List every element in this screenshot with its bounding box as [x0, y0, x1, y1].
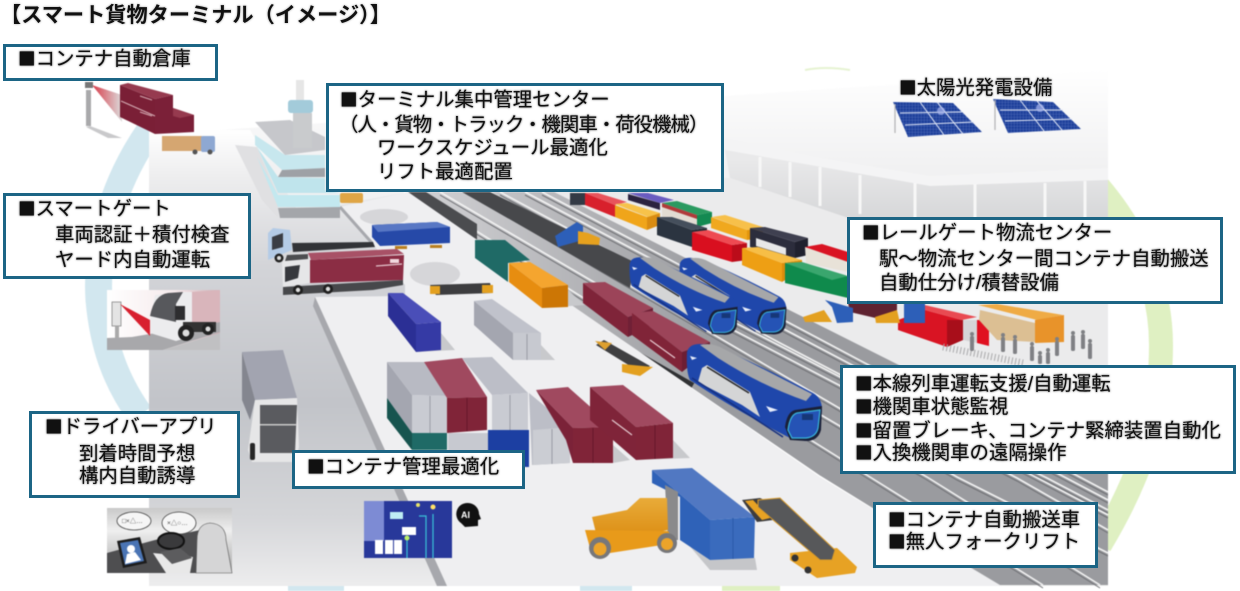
label: terminal central control center: ■ターミナル集中管理センター: [340, 87, 610, 112]
label: container management optimization: ■コンテナ管理最適化: [307, 454, 499, 479]
AGV carts: [430, 283, 653, 376]
label: train operation functions: ■入換機関車の遠隔操作: [855, 440, 1067, 465]
rail gate logistics center: [803, 300, 1064, 363]
label: automated vehicles: [873, 502, 1098, 568]
label: smart gate: 車両認証＋積付検査: [55, 224, 230, 246]
green ring arc: [722, 68, 1161, 591]
label: container automated warehouse: ■コンテナ自動倉庫: [18, 46, 191, 71]
label: terminal central control center: リフト最適配置: [377, 161, 513, 183]
rail yard: [404, 192, 1108, 588]
driver app image: [107, 508, 232, 573]
lift with blue container on track: [555, 222, 600, 247]
label: solar power equipment: ■太陽光発電設備: [899, 75, 1052, 100]
label: terminal central control center: （人・貨物・トラック・機関車・荷役機械）: [339, 114, 707, 136]
label: train operation functions: ■留置ブレーキ、コンテナ緊締装置自動化: [855, 418, 1221, 443]
approaching truck: [242, 350, 299, 462]
label: train operation functions: ■本線列車運転支援/自動運転: [855, 371, 1111, 396]
ground and road: [149, 70, 1108, 586]
conveyor AGV: [742, 498, 857, 578]
solar panels: [893, 99, 1081, 137]
label: driver app: 構内自動誘導: [79, 465, 195, 487]
label: container automated warehouse: [3, 44, 218, 81]
warehouse truck: [162, 136, 215, 154]
blue ring arc: [99, 130, 632, 591]
logistics building wall: [540, 138, 1108, 470]
title: 【スマート貨物ターミナル（イメージ）】: [0, 4, 391, 27]
AI optimization screen: [364, 501, 452, 558]
AI head icon: AI: [461, 510, 470, 520]
label: train operation functions: ■機関車状態監視: [855, 394, 1008, 419]
label: driver app: [29, 411, 240, 498]
container warehouse sensor and containers: [85, 82, 194, 138]
label: smart gate: ■スマートゲート: [18, 196, 171, 221]
label: automated vehicles: ■無人フォークリフト: [888, 529, 1080, 554]
label: driver app: ■ドライバーアプリ: [45, 414, 217, 439]
label: driver app: 到着時間予想: [79, 443, 195, 465]
driver app image: □×△…: [122, 516, 143, 525]
label: smart gate: ヤード内自動運転: [55, 249, 210, 271]
label: container management optimization: [292, 450, 525, 489]
driver app image: ×△○…: [167, 518, 188, 527]
container stack yard: [387, 240, 690, 467]
label: automated vehicles: ■コンテナ自動搬送車: [888, 507, 1080, 532]
terminal control tower building: [235, 80, 363, 218]
label: rail gate logistics center: 自動仕分け/積替設備: [879, 272, 1059, 294]
label: rail gate logistics center: ■レールゲート物流センター: [862, 220, 1112, 245]
yard platform: [313, 192, 1000, 586]
label: train operation functions: [840, 365, 1236, 474]
trucks at the gate: [268, 222, 450, 295]
label: terminal central control center: ワークスケジュール最適化: [377, 137, 608, 159]
AI head icon: [456, 503, 481, 527]
smart gate sensor image: [107, 290, 220, 350]
blue locomotive front: [687, 344, 822, 441]
blue locomotive middle: [629, 257, 738, 335]
label: terminal central control center: [326, 83, 724, 192]
upper freight container row: [570, 193, 848, 298]
label: rail gate logistics center: 駅～物流センター間コンテナ自動搬送: [879, 248, 1209, 270]
forklift carrying container: [585, 468, 757, 570]
label: rail gate logistics center: [847, 217, 1223, 304]
blue locomotive rear: [680, 258, 786, 334]
label: smart gate: [3, 193, 251, 279]
people at logistics center: [970, 330, 1092, 364]
wagon containers on the main line: [583, 282, 710, 372]
